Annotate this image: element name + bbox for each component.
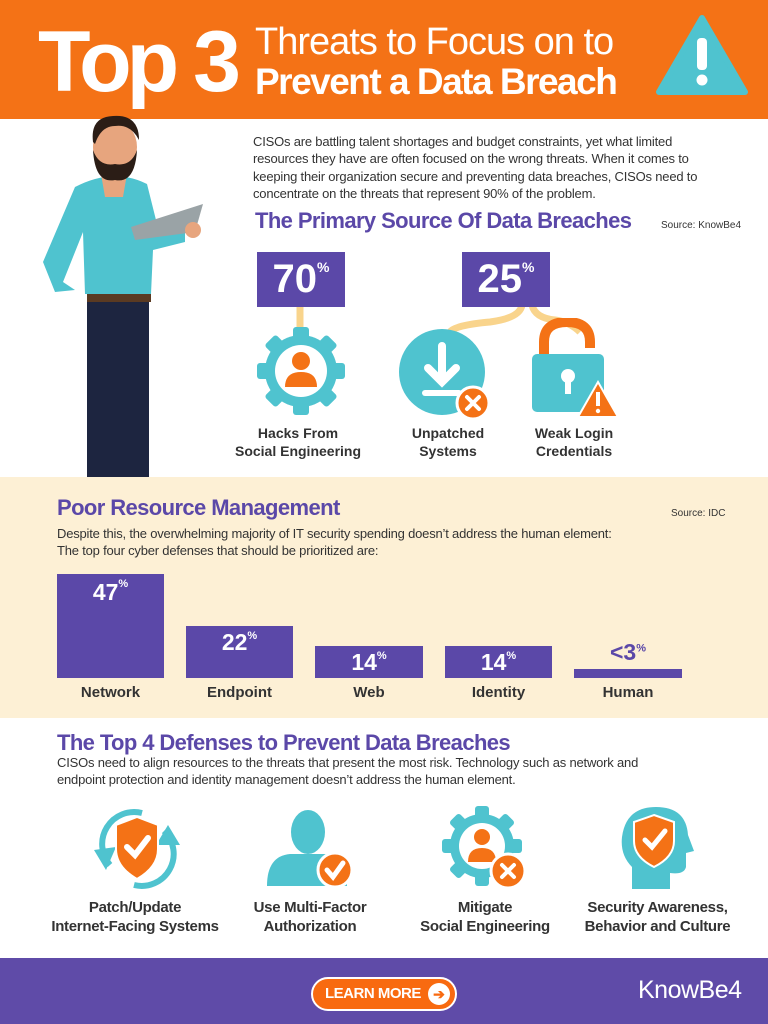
bar chart: Network — [81, 684, 140, 701]
icon: user check — [267, 810, 350, 886]
bar: endpoint: 22% — [222, 629, 257, 655]
bar: endpoint — [186, 626, 293, 678]
icon: warning triangle — [656, 15, 748, 95]
label: social engineering: Social Engineering — [235, 443, 361, 459]
bar: web: 14% — [351, 649, 387, 675]
bar: human — [574, 669, 682, 678]
title: subtitle: Prevent a Data Breach — [255, 61, 616, 102]
description: Despite this, the overwhelming majority of IT security spending doesn’t address the human element: — [57, 526, 612, 541]
stat: 25%: 25% — [478, 257, 534, 301]
stat: 70%: 70% — [273, 257, 329, 301]
label: unpatched: Systems — [419, 443, 477, 459]
label: social engineering: Hacks From — [258, 425, 338, 441]
bar: identity: 14% — [481, 649, 516, 675]
icon: lock warning — [532, 318, 616, 416]
icon: download x — [399, 329, 488, 418]
label: patch: Patch/Update — [89, 899, 181, 916]
label: unpatched — [412, 425, 484, 459]
bar chart: Identity — [472, 684, 525, 701]
bar chart — [57, 574, 682, 701]
label: mitigate: Social Engineering — [420, 918, 550, 935]
label: awareness — [585, 899, 730, 935]
bar: identity — [445, 646, 552, 678]
stat: 70% — [257, 252, 345, 307]
bar labels — [81, 684, 653, 701]
description: The top four cyber defenses that should be prioritized are: — [57, 543, 378, 558]
heading: top 4 defenses: The Top 4 Defenses to Prevent Data Breaches — [57, 730, 510, 755]
label: weak login — [534, 425, 613, 459]
bar chart: Human — [603, 684, 653, 701]
bar chart: Endpoint — [207, 684, 272, 701]
source note: Source: IDC — [671, 508, 725, 519]
heading: primary source: The Primary Source Of Data Breaches — [255, 208, 631, 233]
label: mitigate — [420, 899, 550, 935]
title: subtitle: Threats to Focus on to — [255, 21, 613, 63]
connectors — [296, 307, 581, 334]
heading: Poor Resource Management — [57, 495, 340, 520]
label: MFA: Use Multi-Factor — [254, 899, 366, 916]
footer — [0, 958, 768, 1024]
bar: web — [315, 646, 423, 678]
logo: KnowBe4: KnowBe4 — [638, 976, 742, 1004]
icon: patch cycle shield — [94, 809, 180, 889]
title: Top 3: Top 3 — [38, 14, 236, 110]
bar chart: Web — [353, 684, 385, 701]
label: awareness: Behavior and Culture — [585, 918, 730, 935]
label: awareness: Security Awareness, — [587, 899, 728, 916]
button: learn more: LEARN MORE — [325, 985, 421, 1002]
bar: network — [57, 574, 164, 678]
source note: Source: KnowBe4 — [661, 220, 741, 231]
label: social engineering — [235, 425, 361, 459]
icon: gear person — [257, 327, 345, 415]
label: MFA — [254, 899, 366, 935]
icon: gear person x — [442, 806, 524, 886]
label: weak login: Weak Login — [535, 425, 613, 441]
button: learn more: ➔ — [433, 986, 445, 1002]
label: patch — [51, 899, 219, 935]
panel: poor resource management — [0, 477, 768, 718]
title: subtitle — [255, 21, 616, 102]
label: mitigate: Mitigate — [458, 899, 512, 916]
stat: 25% — [462, 252, 550, 307]
header banner — [0, 0, 768, 119]
icon: head shield — [622, 807, 694, 889]
description: CISOs need to align resources to the threats that present the most risk. Technology such as network and endpoint protection and identity management doesn’t address the human element. — [57, 755, 638, 786]
label: weak login: Credentials — [536, 443, 612, 459]
label: unpatched: Unpatched — [412, 425, 484, 441]
label: patch: Internet-Facing Systems — [51, 918, 219, 935]
button: learn more — [311, 977, 457, 1011]
description — [57, 526, 612, 558]
value: human: <3% — [610, 639, 646, 665]
label: MFA: Authorization — [264, 918, 356, 935]
intro text: CISOs are battling talent shortages and budget constraints, yet what limited resources they have are often focused on the wrong threats. When it comes to keeping their organization secure and preventing data breaches, CISOs need to concentrate on the threats that represent 90% of the problem. — [253, 134, 697, 201]
bar: network: 47% — [93, 578, 128, 605]
illustration: man with laptop — [43, 116, 203, 477]
